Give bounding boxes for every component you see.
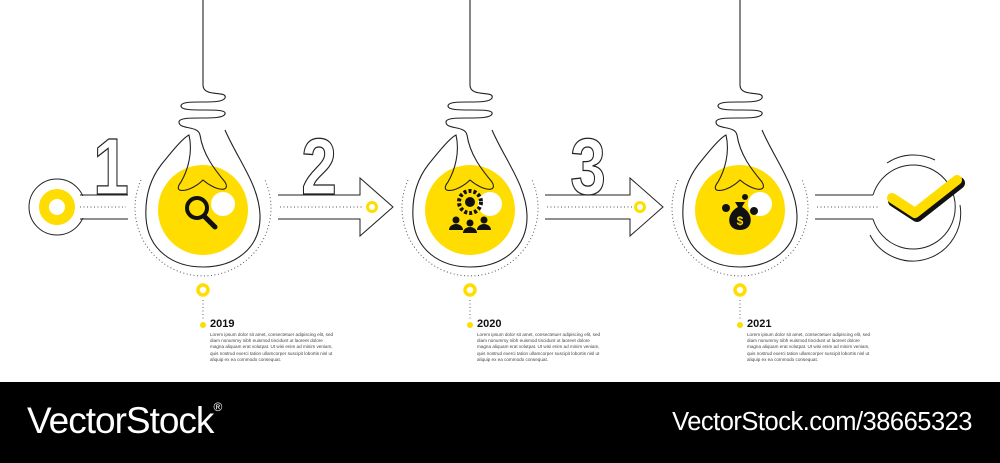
footer banner: VectorStock.com/38665323 xyxy=(672,408,972,436)
timeline markers xyxy=(198,285,745,295)
text block 2021: Lorem ipsum dolor sit amet, consectetuer adipiscing elit, sed diam nonummy nibh euismod tincidunt ut laoreet dolore magna aliquam erat volutpat. Ut wisi enim ad minim veniam, quis nostrud exerci tation ullamcorper suscipit lobortis nisl ut aliquip ex ea commodo consequat. xyxy=(747,332,870,362)
bulb 3 xyxy=(672,0,808,276)
icon: money bag: $ xyxy=(737,214,744,228)
text block 2019: 2019 xyxy=(210,318,234,330)
final check node xyxy=(815,155,961,261)
icon: magnifier xyxy=(187,198,215,227)
step 1 start node xyxy=(29,179,130,235)
arrow 3: 3 xyxy=(570,122,606,212)
arrow 3 xyxy=(545,122,663,236)
footer banner: VectorStock® xyxy=(27,400,221,441)
text block 2019: Lorem ipsum dolor sit amet, consectetuer adipiscing elit, sed diam nonummy nibh euismod tincidunt ut laoreet dolore magna aliquam erat volutpat. Ut wisi enim ad minim veniam, quis nostrud exerci tation ullamcorper suscipit lobortis nisl ut aliquip ex ea commodo consequat. xyxy=(210,332,333,362)
text block 2020 xyxy=(477,318,600,362)
number 1: 1 xyxy=(93,122,129,212)
text block 2020: Lorem ipsum dolor sit amet, consectetuer adipiscing elit, sed diam nonummy nibh euismod tincidunt ut laoreet dolore magna aliquam erat volutpat. Ut wisi enim ad minim veniam, quis nostrud exerci tation ullamcorper suscipit lobortis nisl ut aliquip ex ea commodo consequat. xyxy=(477,332,600,362)
text block 2021 xyxy=(747,318,870,362)
footer banner xyxy=(0,382,1000,463)
arrow 2 xyxy=(278,122,393,236)
icon: money bag xyxy=(722,194,758,230)
bulb 2 xyxy=(402,0,538,276)
text block 2019 xyxy=(210,318,333,362)
text block 2021: 2021 xyxy=(747,318,771,330)
arrow 2: 2 xyxy=(301,122,337,212)
icon: gear team xyxy=(449,191,491,233)
text block 2020: 2020 xyxy=(477,318,501,330)
bulb 1 xyxy=(135,0,271,276)
